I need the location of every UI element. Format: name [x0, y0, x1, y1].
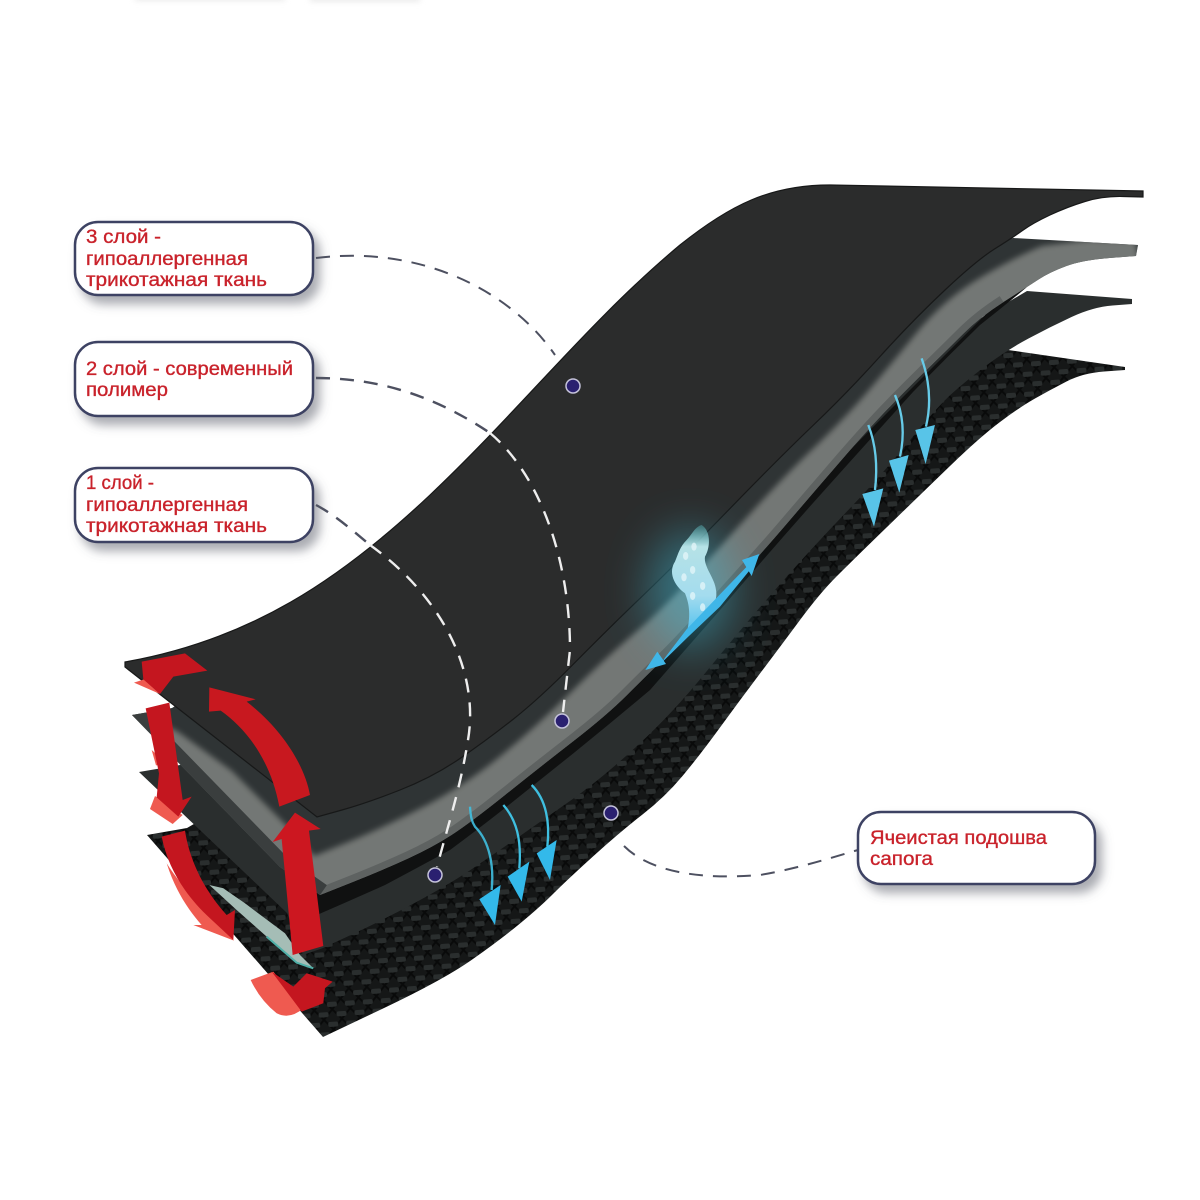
- callout: mesh sole: Ячеистая подошва: [870, 828, 1047, 849]
- arrow: large curved: [209, 687, 310, 807]
- arrow: moisture spreading along the layer: [645, 554, 759, 670]
- layer 1: lower knit fabric: [139, 287, 1132, 955]
- leader line: layer 1: [316, 505, 470, 867]
- arrows: moisture going down, left group: [470, 785, 557, 925]
- red flex arrows: [134, 653, 333, 1016]
- callout: mesh sole: [858, 812, 1095, 884]
- arrow: top corner: [134, 653, 207, 694]
- arrow: upward: [273, 813, 323, 955]
- leader line: layer 2: [316, 378, 570, 712]
- marker: layer 2 dot: [555, 714, 569, 728]
- layer 2: modern polymer: [97, 238, 1147, 916]
- callout: layer 1: 1 слой -: [86, 473, 154, 494]
- callout: layer 1: [75, 468, 313, 542]
- marker: mesh sole dot: [604, 806, 618, 820]
- infographic: boot fabric layers: [74, 0, 1144, 1037]
- callout: layer 3: гипоаллергенная: [86, 249, 248, 270]
- callout: mesh sole: сапога: [870, 849, 933, 870]
- callout: layer 3: [75, 222, 313, 295]
- tear in the mesh layer: [209, 885, 313, 968]
- marker: layer 3 dot: [566, 379, 580, 393]
- leader line: mesh sole: [624, 846, 858, 876]
- callout: layer 1: трикотажная ткань: [86, 516, 267, 537]
- leader line: layer 3: [316, 256, 555, 355]
- arrow: bottom curved: [251, 972, 333, 1016]
- callout: layer 2: [75, 342, 313, 416]
- layer: mesh sole: [147, 350, 1125, 1037]
- callout: layer 3: 3 слой -: [86, 227, 161, 248]
- callout: layer 3: трикотажная ткань: [86, 270, 267, 291]
- callout: layer 2: полимер: [86, 380, 168, 401]
- callout: layer 1: гипоаллергенная: [86, 495, 248, 516]
- faint cropped text at top edge: [135, 0, 420, 2]
- blue moisture glow: [648, 530, 732, 650]
- callout: layer 2: 2 слой - современный: [86, 359, 293, 380]
- arrow: lower left curved: [162, 831, 235, 941]
- layer 3: upper knit fabric: [125, 185, 1143, 817]
- marker: layer 1 dot: [428, 868, 442, 882]
- arrow: left downward: [146, 703, 192, 824]
- arrows: moisture going down, right group: [862, 358, 935, 527]
- icon: moisture blob with droplets: [672, 525, 716, 633]
